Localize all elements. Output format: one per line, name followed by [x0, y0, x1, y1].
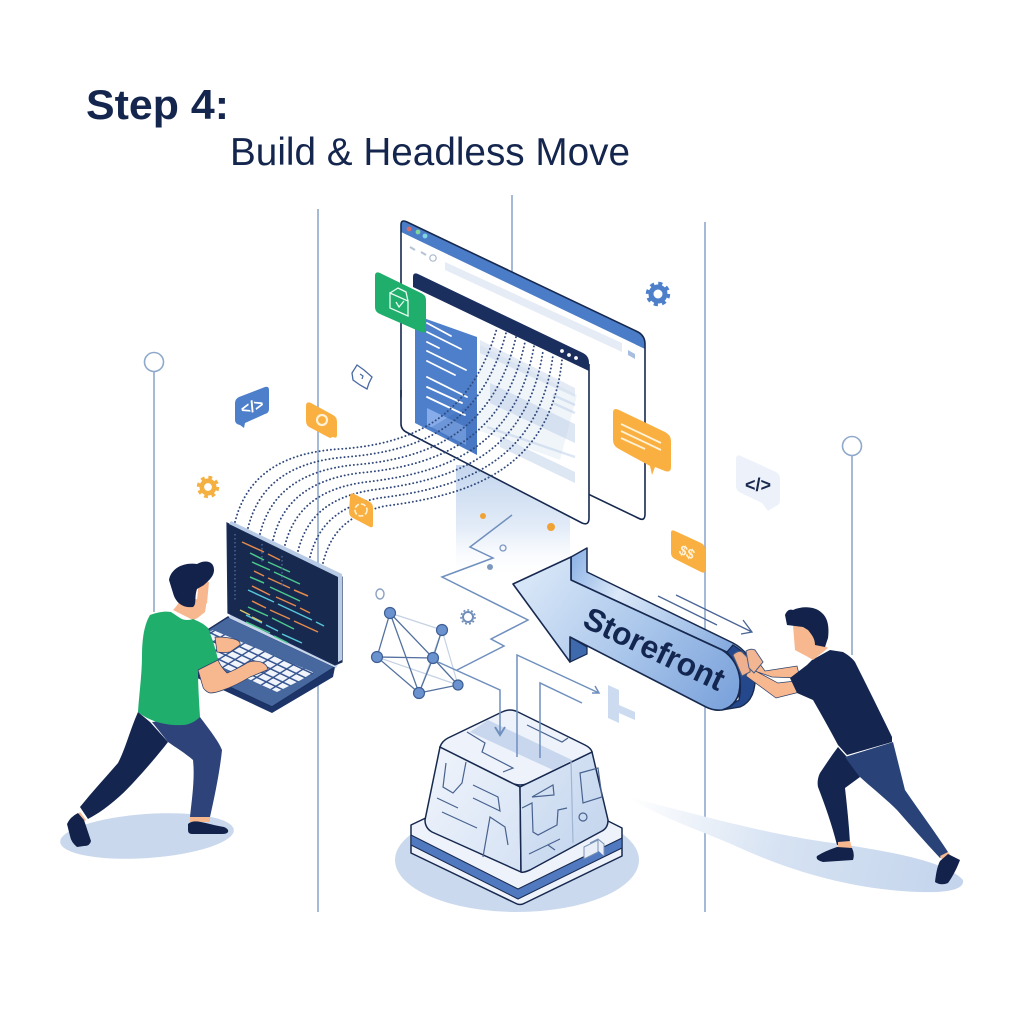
- right floor shadow: [627, 797, 963, 892]
- icon: light blue block: [608, 685, 635, 723]
- front browser window: [401, 273, 589, 524]
- top band: [470, 720, 572, 770]
- flow lines and arrows: [438, 515, 599, 758]
- left person: [67, 562, 267, 847]
- circuit traces: [437, 725, 602, 857]
- light beam under browser: [456, 465, 570, 580]
- Storefront arrow: [513, 548, 755, 710]
- ankle: [838, 841, 951, 861]
- icon: blue code bubble: </>: [239, 396, 266, 419]
- right person: [733, 607, 960, 884]
- arrow lower notch: [570, 637, 587, 662]
- icon: light code bubble: [736, 455, 780, 511]
- cube platform: [395, 710, 639, 912]
- arms: [746, 660, 800, 698]
- title: [86, 81, 630, 174]
- network graph: [372, 589, 475, 698]
- arrow end cap: [722, 645, 755, 710]
- top face: [440, 710, 592, 785]
- base: [411, 775, 622, 904]
- motion lines: [658, 595, 752, 634]
- icon: small outline tag: [352, 365, 372, 389]
- neck and face: [793, 625, 828, 660]
- browser windows: [401, 221, 645, 524]
- hand on keys: [215, 637, 240, 652]
- front leg: [845, 742, 948, 858]
- arm: [198, 660, 267, 693]
- arrow face: [513, 557, 740, 710]
- icon: orange sync badge: [349, 493, 373, 527]
- hands: [733, 649, 763, 676]
- icon: orange bubble: [306, 402, 337, 438]
- icon: blue code bubble: [235, 387, 269, 428]
- icon: orange gear: [199, 478, 217, 496]
- ankles: [77, 812, 210, 822]
- shoes: [67, 813, 228, 847]
- front leg: [152, 717, 222, 817]
- dotted data streams: [235, 328, 562, 563]
- back leg: [818, 747, 860, 845]
- hair: [785, 607, 828, 647]
- icon: blue gear: [648, 284, 668, 304]
- title: Build & Headless Move: [230, 131, 630, 174]
- code lines on screen: [235, 534, 324, 643]
- arrow label: Storefront: [578, 600, 731, 698]
- laptop: [165, 521, 342, 713]
- hair: [169, 562, 214, 607]
- left face: [425, 747, 521, 872]
- icon: orange dollar tag: [671, 530, 705, 573]
- arrow top extrusion: [571, 548, 755, 700]
- right face: [520, 752, 608, 872]
- icon: green mail badge: [375, 272, 426, 333]
- shirt: [138, 612, 218, 725]
- shoes: [817, 847, 960, 884]
- shirt: [790, 650, 892, 755]
- neck: [173, 598, 207, 620]
- icon: light code bubble: </>: [745, 475, 771, 495]
- icon: orange dollar tag: $$: [677, 542, 698, 563]
- cube shadow: [395, 808, 639, 912]
- title: Step 4:: [86, 81, 229, 128]
- clip: [584, 839, 604, 859]
- left person shadow: [59, 808, 235, 864]
- back browser window: [401, 221, 645, 519]
- vertical guide lines: [144, 195, 862, 912]
- face: [196, 580, 209, 610]
- back leg: [80, 712, 168, 819]
- icon: orange chat bubble: [613, 409, 671, 475]
- flow dots: [480, 513, 555, 570]
